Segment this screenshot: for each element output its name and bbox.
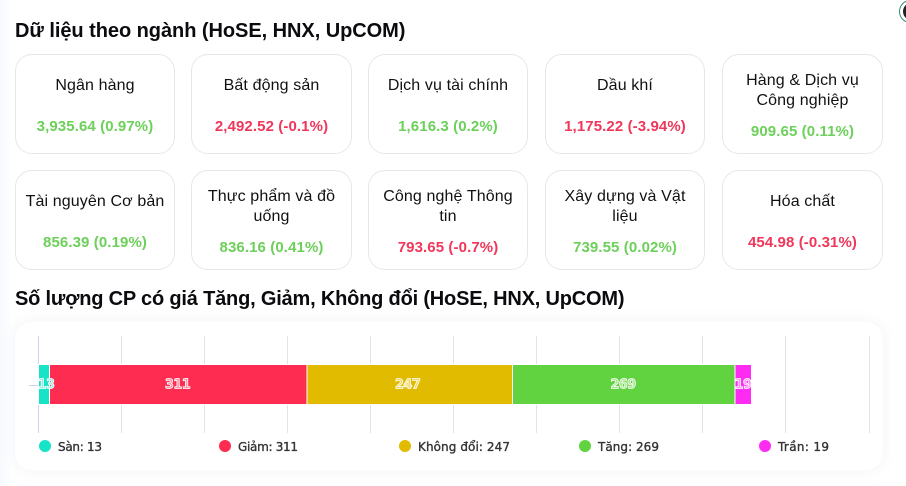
panel: Công nghệ Thông tin: tin [439,208,457,224]
panel: Hóa chất [722,170,883,270]
panel: Thực phẩm và đồ uống [191,170,352,270]
panel: Xây dựng và Vật liệu: liệu [612,208,638,224]
panel: Bất động sản: Bất động sản [224,76,319,94]
panel: Dầu khí [545,54,705,154]
panel: Ngân hàng [15,54,175,154]
bar value labels: 247 [395,378,421,392]
panel: Dịch vụ tài chính [368,54,528,154]
panel: stacked bar chart card [15,322,883,470]
bar value labels: 13 [38,378,55,392]
heading: stock counts: Số lượng CP có giá Tăng, Giảm, Không đổi (HoSE, HNX, UpCOM) [15,288,624,310]
panel: Dầu khí: Dầu khí [597,76,653,94]
panel: Xây dựng và Vật liệu: 739.55 (0.02%) [573,238,677,256]
panel: Bất động sản [191,54,352,154]
panel: Dịch vụ tài chính: Dịch vụ tài chính [388,76,508,94]
icon: corner avatar [899,0,906,23]
bar segments [38,364,752,404]
panel: Tài nguyên Cơ bản: Tài nguyên Cơ bản [26,192,164,210]
panel: Dầu khí: 1,175.22 (-3.94%) [564,118,686,134]
panel: Ngân hàng: 3,935.64 (0.97%) [37,118,153,134]
panel: Thực phẩm và đồ uống: uống [253,208,290,224]
panel: Hàng & Dịch vụ Công nghiệp [722,54,883,154]
legend: Trần: 19 [777,440,829,454]
panel: Xây dựng và Vật liệu: Xây dựng và Vật [564,188,686,204]
panel: Tài nguyên Cơ bản: 856.39 (0.19%) [43,234,147,250]
bar value labels: 269 [610,378,636,392]
panel: Công nghệ Thông tin: Công nghệ Thông [383,188,513,204]
left edge tint [0,0,12,486]
panel: Hóa chất: 454.98 (-0.31%) [748,234,857,250]
panel: Hóa chất: Hóa chất [770,192,835,210]
panel: Hàng & Dịch vụ Công nghiệp: Hàng & Dịch vụ [746,72,859,88]
panel: Bất động sản: 2,492.52 (-0.1%) [215,118,328,134]
bar value labels [38,378,752,392]
panel: Hàng & Dịch vụ Công nghiệp: Công nghiệp [756,92,849,108]
panel: Công nghệ Thông tin: 793.65 (-0.7%) [398,238,498,256]
bar value labels: 311 [165,378,191,392]
legend: Sàn: 13 [58,440,102,454]
legend: Không đổi: 247 [418,440,510,454]
panel: Xây dựng và Vật liệu [545,170,705,270]
bar value labels: 19 [735,378,752,392]
panel: Hàng & Dịch vụ Công nghiệp: 909.65 (0.11%) [751,122,854,140]
panel: Tài nguyên Cơ bản [15,170,175,270]
panel: Dịch vụ tài chính: 1,616.3 (0.2%) [398,118,498,134]
panel: Thực phẩm và đồ uống: Thực phẩm và đồ [208,188,335,204]
legend: Tăng: 269 [597,440,659,454]
panel: Công nghệ Thông tin [368,170,528,270]
legend [39,440,829,454]
panel: Ngân hàng: Ngân hàng [55,76,135,94]
legend: Giảm: 311 [238,440,298,454]
heading: sector data: Dữ liệu theo ngành (HoSE, HNX, UpCOM) [15,20,405,42]
panel: Thực phẩm và đồ uống: 836.16 (0.41%) [220,238,323,256]
